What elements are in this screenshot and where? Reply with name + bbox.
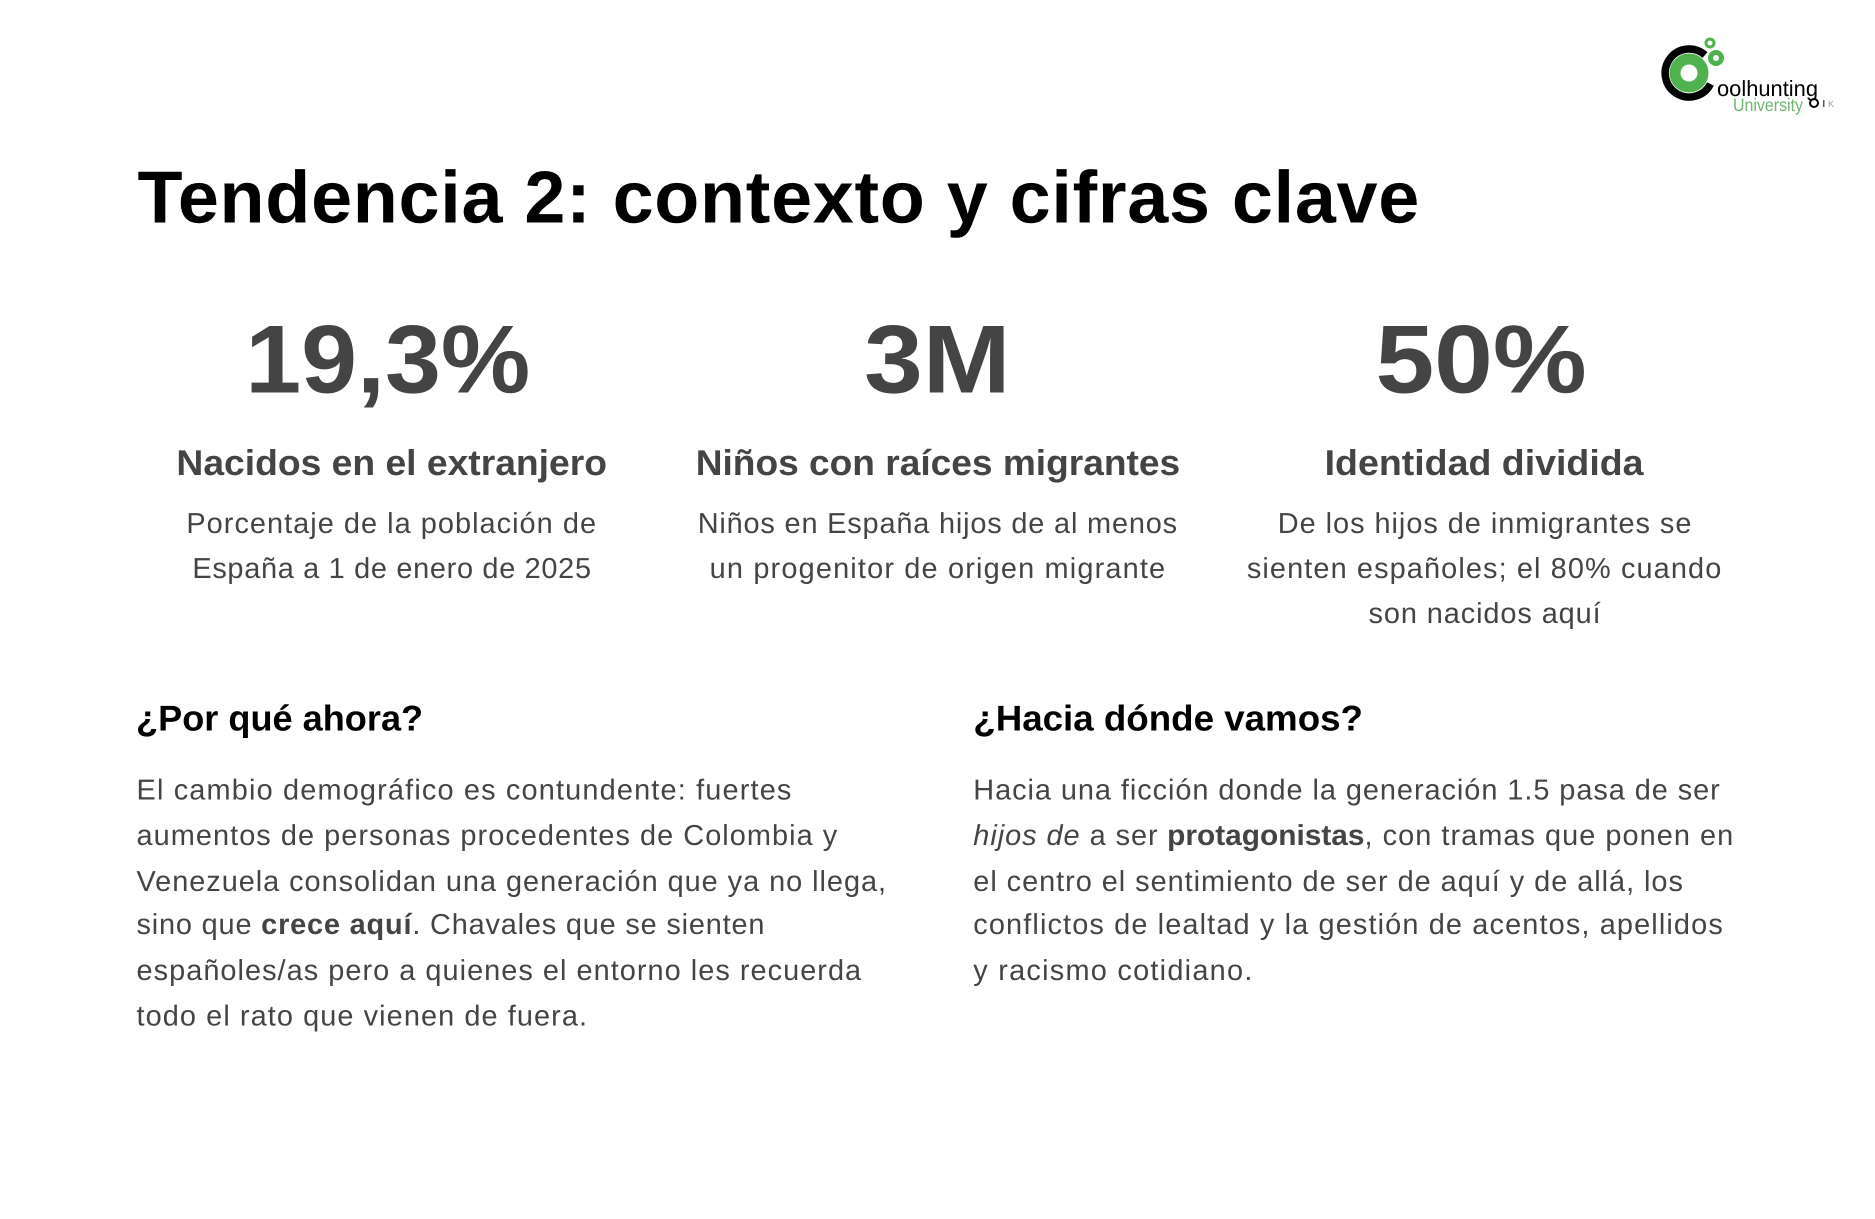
logo: Coolhunting University: University bbox=[1733, 95, 1803, 115]
stat description bbox=[186, 508, 596, 585]
stat number: 19,3%: 19,3% bbox=[245, 305, 530, 414]
stat number: 50%: 50% bbox=[1375, 305, 1587, 414]
stat description: España a 1 de enero de 2025 bbox=[192, 553, 591, 585]
paragraph: sino que crece aquí. Chavales que se sienten bbox=[137, 909, 764, 941]
stat description: Porcentaje de la población de bbox=[186, 508, 596, 540]
paragraph: El cambio demográfico es contundente: fuertes bbox=[137, 774, 791, 806]
paragraph: el centro el sentimiento de ser de aquí y de allá, los bbox=[973, 866, 1683, 898]
paragraph bbox=[973, 774, 1733, 987]
heading: ¿Hacia dónde vamos?: ¿Hacia dónde vamos? bbox=[973, 698, 1363, 739]
paragraph: protagonistas bbox=[1167, 820, 1364, 852]
paragraph: todo el rato que vienen de fuera. bbox=[137, 1001, 587, 1033]
paragraph: Hacia una ficción donde la generación 1.5 pasa de ser bbox=[973, 774, 1720, 806]
stat description bbox=[698, 508, 1177, 585]
page content bbox=[136, 155, 1733, 1033]
title: Tendencia 2: contexto y cifras clave bbox=[138, 155, 1419, 238]
paragraph: Venezuela consolidan una generación que ya no llega, bbox=[137, 866, 886, 898]
heading: ¿Por qué ahora?: ¿Por qué ahora? bbox=[136, 698, 423, 739]
paragraph: españoles/as pero a quienes el entorno les recuerda bbox=[137, 955, 862, 987]
stat heading: Nacidos en el extranjero: Nacidos en el extranjero bbox=[176, 442, 607, 483]
paragraph: y racismo cotidiano. bbox=[973, 955, 1252, 987]
stat heading: Niños con raíces migrantes: Niños con raíces migrantes bbox=[696, 442, 1180, 483]
paragraph: hijos de a ser bbox=[973, 820, 1158, 852]
stat number: 3M: 3M bbox=[864, 305, 1011, 414]
stat description: sienten españoles; el 80% cuando bbox=[1247, 553, 1721, 585]
panel: stat 19,3% bbox=[176, 305, 607, 585]
stat description: son nacidos aquí bbox=[1368, 598, 1601, 630]
panel: hacia dónde vamos bbox=[973, 698, 1733, 987]
paragraph: conflictos de lealtad y la gestión de acentos, apellidos bbox=[973, 909, 1723, 941]
stat heading: Identidad dividida: Identidad dividida bbox=[1325, 442, 1645, 483]
stat description bbox=[1247, 508, 1721, 630]
panel: stat 3M bbox=[696, 305, 1180, 585]
stat description: De los hijos de inmigrantes se bbox=[1278, 508, 1691, 540]
stat description: Niños en España hijos de al menos bbox=[698, 508, 1177, 540]
logo: Coolhunting University bbox=[1665, 39, 1834, 115]
panel: por qué ahora bbox=[136, 698, 886, 1033]
paragraph: aumentos de personas procedentes de Colombia y bbox=[137, 820, 838, 852]
paragraph: , con tramas que ponen en bbox=[1364, 820, 1733, 852]
paragraph bbox=[137, 774, 886, 1033]
stat description: un progenitor de origen migrante bbox=[710, 553, 1165, 585]
logo: Coolhunting University: oolhunting bbox=[1717, 76, 1818, 101]
logo: Coolhunting University: K bbox=[1828, 99, 1834, 109]
panel: stat 50% bbox=[1247, 305, 1721, 630]
